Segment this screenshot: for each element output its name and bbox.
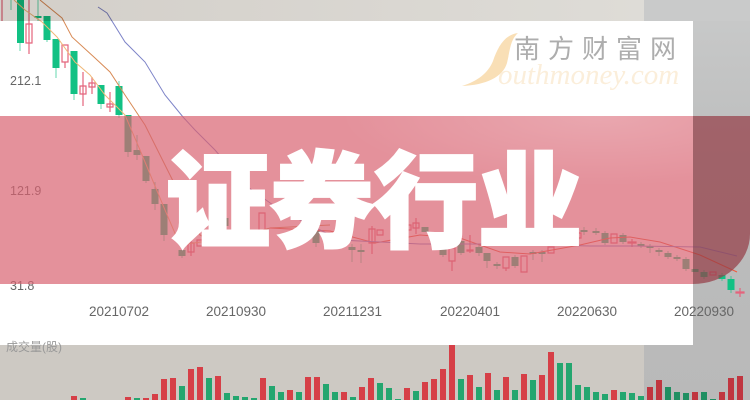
logo chinese name: 南方财富网 <box>514 34 684 64</box>
band highlight <box>300 116 693 186</box>
date axis labels: 20220630 <box>557 304 617 319</box>
green candles <box>11 0 734 293</box>
price axis labels: 212.1 <box>10 74 41 88</box>
moving average: red orange line <box>270 228 737 272</box>
date axis labels: 20220401 <box>440 304 500 319</box>
pink band <box>0 116 693 284</box>
date axis labels: 20211231 <box>323 304 382 319</box>
moving average: blue purple line <box>98 7 737 256</box>
red candles <box>2 0 744 297</box>
moving average: brown orange line <box>40 0 330 243</box>
volume axis label: 成交量(股) <box>6 340 62 354</box>
price axis labels: 31.8 <box>10 279 34 293</box>
price axis labels: 121.9 <box>10 184 41 198</box>
logo swoosh <box>462 33 518 86</box>
darker red volume bars <box>647 376 743 400</box>
background: white chart panel <box>0 0 693 345</box>
green volume bars <box>80 363 644 400</box>
date axis labels: 20220930 <box>674 304 734 319</box>
date axis labels <box>89 304 734 319</box>
dark band corner <box>693 116 750 284</box>
title: 证券行业 <box>166 146 582 262</box>
date axis labels: 20210930 <box>206 304 266 319</box>
background: top right strip <box>644 0 750 21</box>
background: top strip <box>0 0 644 21</box>
red volume bars <box>71 345 617 400</box>
background: right grey column <box>644 0 750 400</box>
volume bars <box>71 345 743 400</box>
logo latin name: outhmoney.com <box>498 59 679 91</box>
darker green volume bars <box>665 387 716 400</box>
date axis labels: 20210702 <box>89 304 149 319</box>
moving average: pale orange line <box>14 0 260 245</box>
watermark logo <box>462 33 684 91</box>
price axis labels <box>10 74 41 293</box>
